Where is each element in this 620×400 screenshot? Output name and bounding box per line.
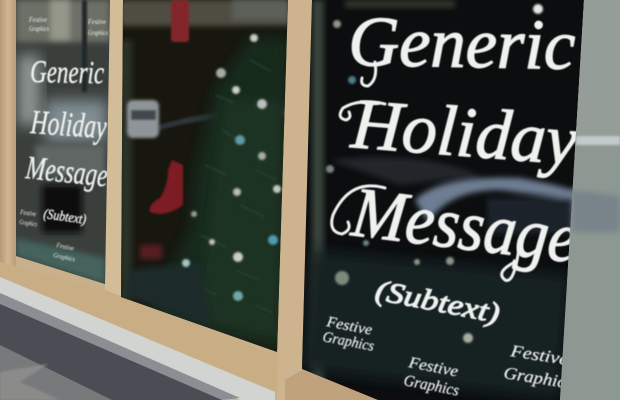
car reflection [330, 157, 578, 234]
panel: left window: Festive [19, 208, 37, 218]
left window lettering: Generic [30, 53, 104, 90]
panel: left window: Graphics [19, 218, 38, 229]
icon: car reflection [127, 100, 288, 138]
small lettering [322, 316, 562, 396]
swash flourishes on capitals [332, 62, 520, 280]
small lettering: Graphics [321, 329, 375, 355]
icon: red cylinder [171, 0, 189, 42]
left window lettering: Holiday [29, 104, 108, 146]
main lettering: Message [347, 172, 582, 278]
panel: left window [16, 0, 110, 290]
panel: left window: Festive [28, 16, 47, 24]
main lettering [347, 2, 582, 330]
pavement and sill [0, 277, 275, 400]
panel: left window: Graphics [88, 29, 108, 37]
panel: left window: Graphics [29, 25, 49, 33]
baubles [182, 34, 281, 301]
panel: left window: Graphics [53, 251, 76, 264]
panel: centre window with tree [120, 0, 290, 355]
baubles [326, 4, 543, 343]
left window lettering [23, 53, 109, 228]
left window lettering: Message [23, 150, 109, 195]
main lettering: Holiday [348, 84, 581, 180]
tree needle texture [195, 60, 277, 313]
main lettering: Generic [348, 2, 576, 85]
small lettering: Festive [324, 314, 374, 339]
left window lettering: (Subtext) [42, 207, 87, 228]
main lettering: (Subtext) [373, 274, 502, 330]
small lettering: Festive [406, 354, 460, 380]
small lettering: Festive [508, 341, 570, 369]
panel: left window: Festive [55, 241, 75, 253]
icon: christmas tree [150, 38, 288, 350]
panel: left window: Festive [87, 18, 106, 26]
panel: right window [300, 0, 590, 400]
small lettering: Graphics [502, 363, 575, 393]
small lettering: Graphics [402, 372, 460, 400]
icon: red stocking [150, 160, 183, 214]
panel: grey-green door at right [560, 0, 620, 400]
